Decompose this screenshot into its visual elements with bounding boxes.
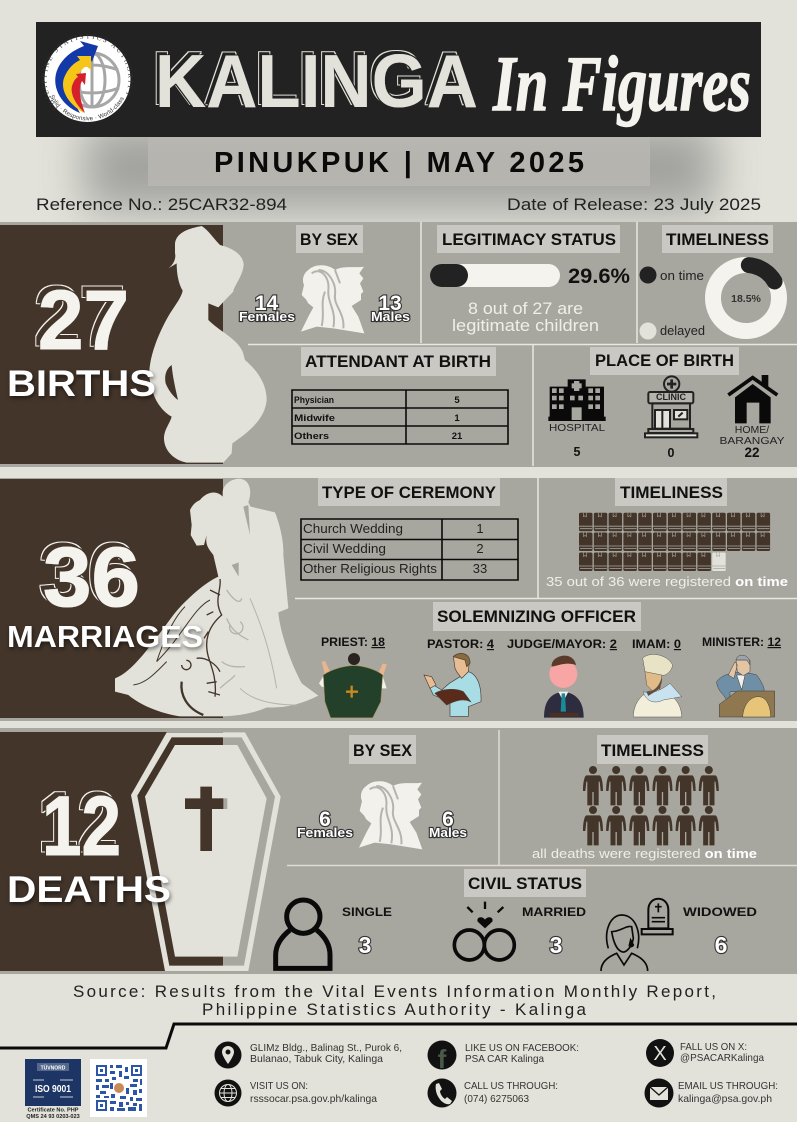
status: widowed bbox=[683, 905, 757, 958]
reference number: Reference No.: 25CAR32-894 bbox=[36, 196, 287, 214]
icon: female and male profiles bbox=[359, 781, 422, 849]
icon: wedding rings bbox=[454, 902, 514, 960]
icon: female and male profiles bbox=[301, 265, 364, 333]
icon: PSA logo bbox=[42, 34, 133, 122]
source note bbox=[73, 982, 716, 1019]
source note: Philippine Statistics Authority - Kalinga bbox=[202, 1000, 587, 1019]
big number: 27: 27 bbox=[38, 273, 129, 367]
donut chart 18.5% bbox=[713, 265, 779, 331]
males count bbox=[429, 808, 467, 840]
heading: timeliness bbox=[597, 735, 708, 764]
timeliness note: all deaths were registered on time bbox=[532, 846, 757, 861]
contact: address: GLIMz Bldg., Balinag St., Purok 6, bbox=[250, 1042, 402, 1054]
table: attendant at birth: Midwife bbox=[294, 413, 335, 424]
contact: email: EMAIL US THROUGH: bbox=[678, 1080, 778, 1092]
icon: single person bbox=[276, 900, 330, 968]
contact: phone: (074) 6275063 bbox=[464, 1093, 529, 1105]
heading: type of ceremony: TYPE OF CEREMONY bbox=[322, 483, 497, 502]
ISO 9001 badge: ISO 9001 bbox=[35, 1084, 71, 1095]
females count bbox=[239, 292, 295, 324]
status: widowed: 6 bbox=[715, 932, 727, 958]
ISO 9001 badge: Certificate No. PHP bbox=[28, 1108, 79, 1114]
ISO 9001 badge: QMS 24 93 0203-023 bbox=[26, 1114, 80, 1120]
males count: 13 bbox=[378, 292, 402, 315]
status: single bbox=[342, 905, 392, 958]
subtitle band bbox=[148, 137, 650, 186]
females count: 14 bbox=[255, 292, 278, 315]
officer: imam bbox=[632, 637, 682, 717]
contact: email bbox=[644, 1078, 778, 1108]
icon: pregnant woman silhouette bbox=[149, 226, 267, 463]
heading: civil status: CIVIL STATUS bbox=[468, 874, 582, 893]
heading: timeliness: TIMELINESS bbox=[601, 741, 704, 760]
label: deaths: DEATHS bbox=[7, 869, 171, 910]
pictogram: registered books bbox=[579, 513, 770, 571]
officer: minister: MINISTER: 12 bbox=[702, 635, 781, 649]
heading: by sex bbox=[296, 225, 363, 253]
release date: Date of Release: 23 July 2025 bbox=[507, 196, 761, 214]
table: attendant at birth: 1 bbox=[454, 413, 460, 424]
legitimacy note: legitimate children bbox=[452, 317, 599, 335]
contact: email: kalinga@psa.gov.ph bbox=[678, 1093, 772, 1105]
subtitle text: PINUKPUK | MAY 2025 bbox=[214, 147, 584, 179]
header shadow bbox=[85, 125, 715, 210]
icon: clinic bbox=[645, 376, 697, 437]
donut chart 18.5%: 18.5% bbox=[731, 293, 762, 305]
status: married: MARRIED bbox=[522, 905, 586, 919]
label: births: BIRTHS bbox=[7, 363, 156, 404]
table: type of ceremony: 33 bbox=[473, 561, 487, 576]
table: attendant at birth: Physician bbox=[294, 395, 334, 406]
males count: Males bbox=[371, 309, 410, 324]
label: marriages: MARRIAGES bbox=[7, 619, 203, 654]
males count bbox=[371, 292, 410, 324]
table: type of ceremony: Church Wedding bbox=[303, 521, 403, 536]
contact: facebook bbox=[428, 1040, 579, 1074]
legend: on time: on time bbox=[660, 269, 704, 283]
contact: X bbox=[646, 1039, 764, 1067]
heading: by sex: BY SEX bbox=[353, 741, 413, 760]
contact: facebook: f bbox=[438, 1044, 447, 1074]
legend: delayed: delayed bbox=[660, 324, 705, 338]
legitimacy note: 8 out of 27 are bbox=[468, 300, 583, 318]
big number: 36: 36 bbox=[43, 530, 140, 624]
place: hospital value: 5 bbox=[574, 445, 581, 459]
timeliness note: 35 out of 36 were registered on time bbox=[546, 574, 788, 589]
heading: legitimacy status: LEGITIMACY STATUS bbox=[442, 230, 616, 249]
heading: place of birth: PLACE OF BIRTH bbox=[595, 351, 734, 370]
icon: widow and tombstone bbox=[601, 899, 673, 971]
title: KALINGA: KALINGA bbox=[155, 39, 478, 123]
table: type of ceremony bbox=[301, 519, 518, 580]
status: widowed: WIDOWED bbox=[683, 905, 757, 919]
heading: by sex: BY SEX bbox=[300, 230, 359, 249]
contact: facebook: LIKE US ON FACEBOOK: bbox=[465, 1042, 579, 1054]
logo motto: Solid · Responsive · World-class bbox=[50, 94, 124, 120]
females count: Females bbox=[239, 309, 295, 324]
footer rule bbox=[0, 1024, 797, 1048]
officer: priest bbox=[319, 635, 387, 718]
heading: civil status bbox=[464, 869, 586, 897]
officer: judge or mayor: JUDGE/MAYOR: 2 bbox=[507, 637, 617, 651]
header banner bbox=[36, 22, 761, 137]
legitimacy note bbox=[452, 300, 599, 335]
contact: phone bbox=[428, 1078, 558, 1108]
table: attendant at birth bbox=[292, 390, 508, 444]
officer: imam: IMAM: 0 bbox=[632, 637, 681, 651]
table: type of ceremony: Civil Wedding bbox=[303, 541, 386, 556]
ISO 9001 badge bbox=[25, 1059, 81, 1120]
table: attendant at birth: 21 bbox=[452, 431, 463, 442]
officer: pastor: PASTOR: 4 bbox=[427, 637, 494, 651]
contact: X: @PSACARKalinga bbox=[680, 1052, 764, 1064]
place: home value: 22 bbox=[744, 445, 760, 460]
icon: house bbox=[728, 375, 777, 423]
legend: delayed bbox=[640, 322, 705, 340]
panel: deaths bbox=[0, 728, 797, 974]
contact: X: FALL US ON X: bbox=[680, 1041, 747, 1053]
officer: judge or mayor bbox=[507, 637, 617, 718]
place: clinic value: 0 bbox=[668, 446, 675, 460]
heading: place of birth bbox=[590, 347, 739, 375]
heading: solemnizing officer bbox=[433, 602, 641, 631]
heading: timeliness bbox=[662, 225, 773, 253]
females count bbox=[297, 808, 353, 840]
heading: attendant at birth: ATTENDANT AT BIRTH bbox=[305, 352, 491, 371]
contact: facebook: PSA CAR Kalinga bbox=[465, 1053, 544, 1065]
pictogram: people bbox=[583, 766, 719, 845]
officer: pastor bbox=[424, 637, 494, 716]
contact: address bbox=[214, 1042, 402, 1068]
contact: phone: CALL US THROUGH: bbox=[464, 1080, 558, 1092]
females count: 6 bbox=[319, 808, 331, 831]
icon: hospital bbox=[548, 379, 606, 421]
heading: timeliness: TIMELINESS bbox=[620, 483, 723, 502]
panel: marriages bbox=[0, 477, 797, 721]
contact: website: rsssocar.psa.gov.ph/kalinga bbox=[250, 1093, 377, 1105]
legend: on time bbox=[640, 266, 704, 284]
officer: minister bbox=[702, 635, 781, 717]
heading: solemnizing officer: SOLEMNIZING OFFICER bbox=[437, 607, 636, 626]
heading: type of ceremony bbox=[318, 478, 500, 506]
place: hospital value bbox=[549, 422, 605, 459]
status: married bbox=[522, 905, 586, 958]
place: home value: HOME/ bbox=[735, 424, 769, 436]
contact: website: VISIT US ON: bbox=[250, 1080, 308, 1092]
place: home value bbox=[720, 424, 784, 460]
contact: X: X bbox=[653, 1043, 667, 1065]
QR code bbox=[90, 1059, 147, 1117]
icon: bride and groom silhouette bbox=[115, 479, 318, 716]
heading: timeliness bbox=[615, 478, 727, 506]
ISO 9001 badge: TÜVNORD bbox=[41, 1064, 66, 1072]
source note: Source: Results from the Vital Events Information Monthly Report, bbox=[73, 982, 716, 1001]
table: attendant at birth: Others bbox=[294, 431, 329, 442]
big number: 12: 12 bbox=[42, 779, 121, 873]
panel: births bbox=[0, 222, 797, 467]
value: 29.6%: 29.6% bbox=[568, 265, 630, 288]
status: married: 3 bbox=[550, 932, 562, 958]
logo ring text: PHILIPPINE STATISTICS AUTHORITY bbox=[42, 34, 133, 110]
table: type of ceremony: 2 bbox=[476, 541, 484, 556]
heading: legitimacy status bbox=[437, 225, 620, 253]
females count: Females bbox=[297, 825, 353, 840]
status: single: SINGLE bbox=[342, 905, 392, 919]
icon: clinic: CLINIC bbox=[656, 392, 686, 402]
progress bar 29.6% bbox=[430, 264, 560, 287]
heading: by sex bbox=[349, 735, 416, 764]
males count: 6 bbox=[442, 808, 454, 831]
table: type of ceremony: Other Religious Rights bbox=[303, 561, 438, 576]
place: home value: BARANGAY bbox=[720, 435, 784, 447]
contact: website bbox=[214, 1080, 377, 1106]
contact: address: Bulanao, Tabuk City, Kalinga bbox=[250, 1053, 383, 1065]
icon: coffin with cross bbox=[131, 732, 281, 971]
heading: attendant at birth bbox=[301, 347, 496, 376]
heading: timeliness: TIMELINESS bbox=[666, 230, 769, 249]
table: type of ceremony: 1 bbox=[476, 521, 484, 536]
officer: priest: PRIEST: 18 bbox=[321, 635, 385, 649]
status: single: 3 bbox=[359, 932, 371, 958]
table: attendant at birth: 5 bbox=[454, 395, 460, 406]
males count: Males bbox=[429, 825, 467, 840]
place: hospital value: HOSPITAL bbox=[549, 422, 605, 434]
